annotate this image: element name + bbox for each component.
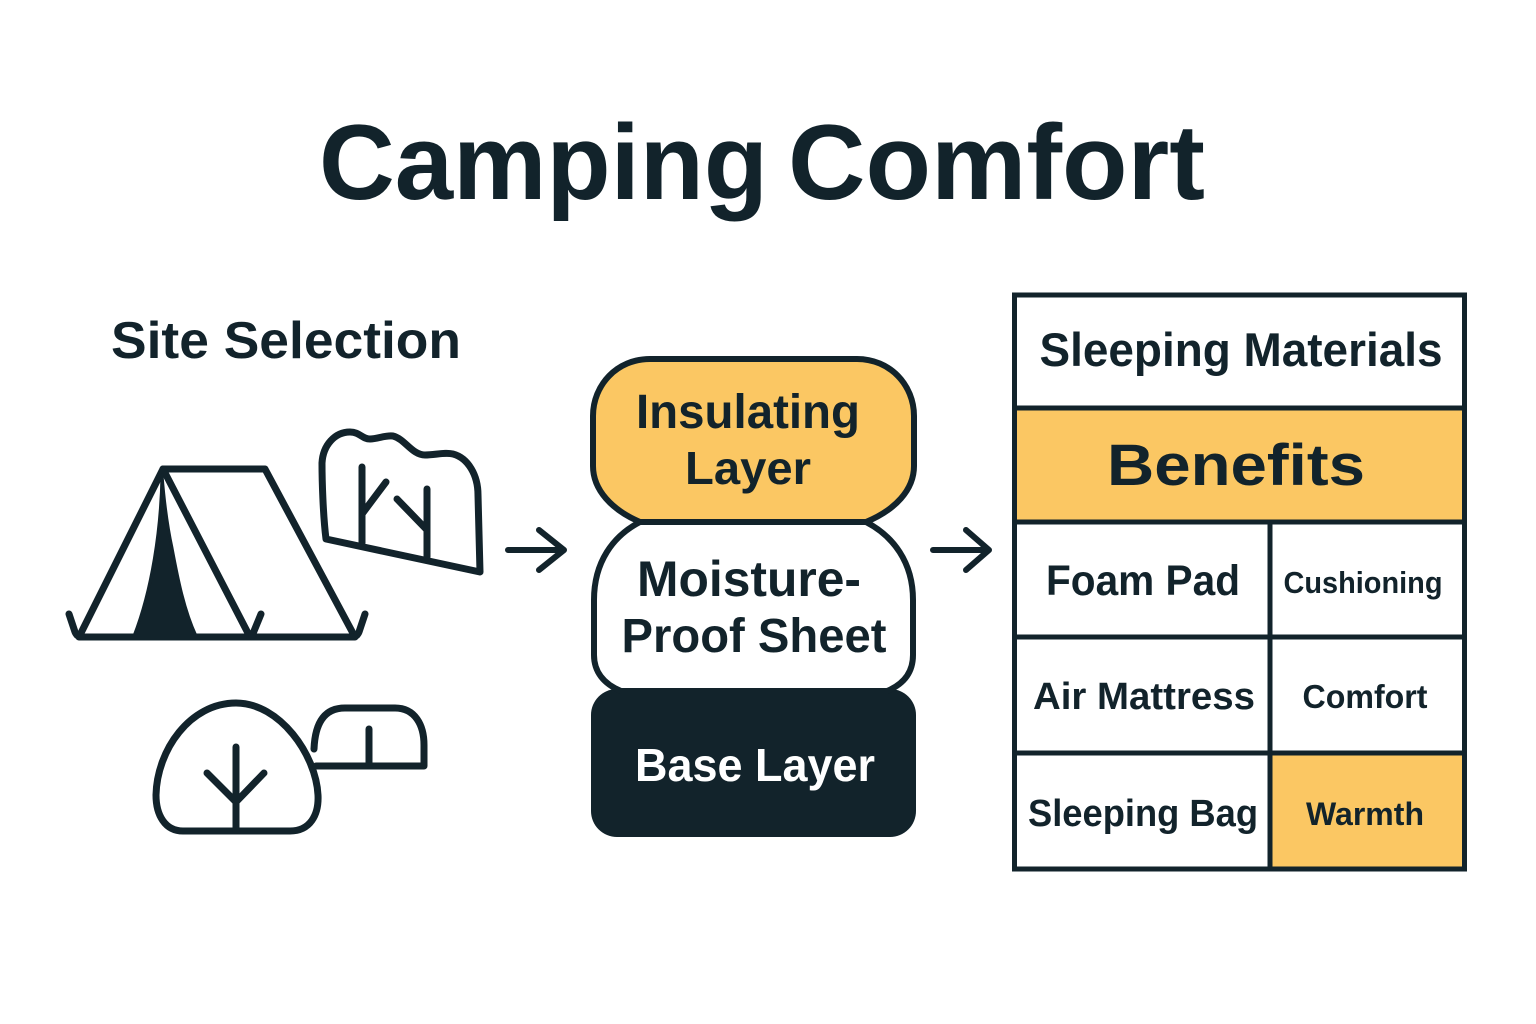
base layer	[591, 689, 916, 837]
benefits row: Benefits	[1107, 433, 1365, 498]
title: Comfort	[788, 102, 1205, 222]
table: sleeping materials	[1014, 295, 1464, 869]
row: sleeping bag: Sleeping Bag	[1028, 793, 1258, 835]
moisture-proof sheet	[594, 522, 913, 691]
row: foam pad: Foam Pad	[1046, 557, 1240, 605]
row: air mattress	[1033, 676, 1428, 718]
insulating layer: Layer	[685, 442, 811, 494]
insulating layer: Insulating	[636, 386, 860, 439]
panel: layer stack	[591, 359, 916, 837]
moisture-proof sheet: Proof Sheet	[622, 610, 887, 663]
icon: upper tree group	[322, 432, 480, 572]
row: sleeping bag: Warmth	[1306, 796, 1424, 832]
row: sleeping bag	[1028, 793, 1424, 835]
row: foam pad	[1046, 557, 1442, 605]
title: Camping	[319, 102, 768, 222]
row: air mattress: Air Mattress	[1033, 676, 1255, 718]
icon: small shrub	[314, 708, 424, 766]
icon: tent	[69, 469, 365, 637]
title	[319, 102, 1205, 222]
arrow: site to layers	[508, 530, 564, 570]
moisture-proof sheet: Moisture-	[637, 551, 861, 607]
arrow: layers to table	[933, 530, 989, 570]
icon: lower tree	[156, 703, 318, 831]
row: foam pad: Cushioning	[1284, 565, 1442, 600]
heading: site selection: Site Selection	[111, 312, 461, 370]
insulating layer	[593, 359, 914, 522]
row: air mattress: Comfort	[1302, 678, 1428, 715]
table header: Sleeping Materials	[1040, 323, 1442, 376]
base layer: Base Layer	[635, 739, 875, 791]
